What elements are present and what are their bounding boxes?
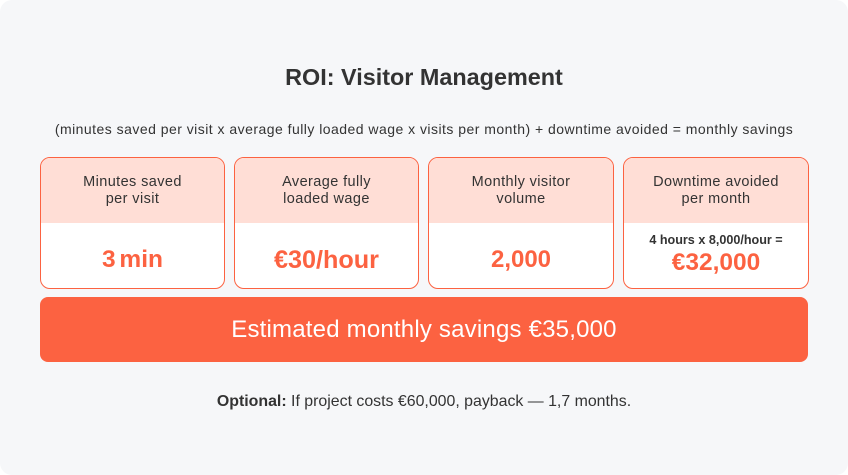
card heading: downtime: per month [682,190,750,206]
savings banner [40,297,808,362]
formula text: (minutes saved per visit x average fully loaded wage x visits per month) + downtime avoided = monthly savings [55,121,793,137]
value: volume: 2,000 [491,246,551,272]
card heading: visitor volume [429,158,613,223]
card heading: visitor volume: Monthly visitor [472,174,570,190]
optional payback note: Optional: If project costs €60,000, payback — 1,7 months. [217,393,631,410]
card heading: visitor volume: volume [496,190,546,206]
savings banner: Estimated monthly savings €35,000 [231,316,617,343]
card heading: downtime [624,158,808,223]
title: ROI: Visitor Management [285,64,563,90]
card heading: minutes saved [41,158,224,223]
card: minutes saved [40,157,225,289]
value: downtime: €32,000 [672,249,760,276]
card heading: downtime: Downtime avoided [653,174,779,190]
downtime calculation: 4 hours x 8,000/hour = [649,233,783,247]
card heading: wage [235,158,418,223]
card: downtime [623,157,809,289]
card: visitor volume [428,157,614,289]
card: wage [234,157,419,289]
card heading: wage: loaded wage [283,190,370,206]
card heading: wage: Average fully [282,174,371,190]
value: wage: €30/hour [274,246,379,274]
card heading: minutes saved: Minutes saved [83,174,182,190]
value: 3 min: 3 min [102,246,163,272]
card heading: minutes saved: per visit [106,190,159,206]
